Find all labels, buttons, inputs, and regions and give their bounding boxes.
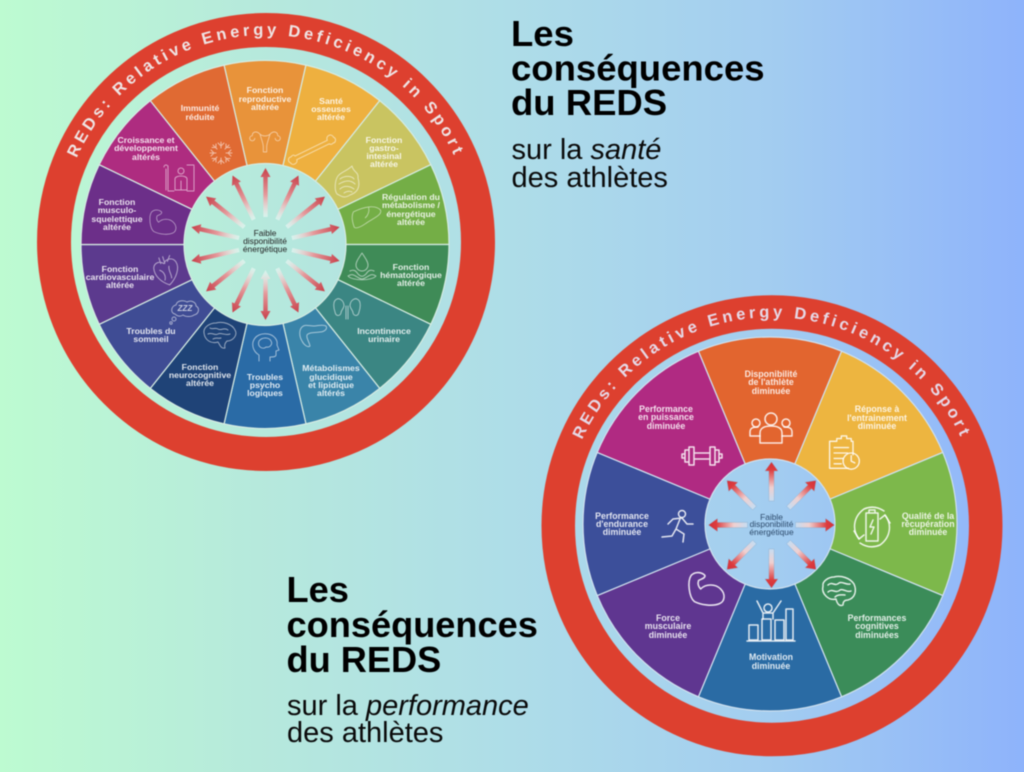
label: régulation du métabolisme: énergétique <box>386 209 436 219</box>
subtitle: des athlètes <box>287 717 443 749</box>
ring title: REDs: Relative Energy Deficiency in Sport <box>66 24 464 158</box>
icon: growth frame <box>164 165 194 191</box>
label: cardiovasculaire: cardiovasculaire <box>86 272 154 282</box>
title: conséquences <box>511 48 765 88</box>
hub text: énergétique <box>243 244 287 254</box>
label: croissance: développement <box>114 143 178 153</box>
icon: chart and person <box>747 601 795 641</box>
panel: wheel of health consequences <box>36 12 496 472</box>
icon: sleep cloud: ZZZ <box>177 304 193 313</box>
icon: sleep cloud <box>170 301 198 324</box>
label: hématologique: Fonction <box>393 262 429 272</box>
label: métabolismes: et lipidique <box>308 380 354 390</box>
hub arrows <box>190 168 341 320</box>
icon: drop and lotus <box>348 253 376 280</box>
sector: troubles psychologiques <box>224 323 306 428</box>
label: neurocognitive: Fonction <box>182 362 218 372</box>
hub text: énergétique <box>749 527 794 537</box>
label: croissance: altérés <box>132 152 160 162</box>
label: hématologique: hématologique <box>380 270 442 280</box>
icon: runner <box>662 510 693 542</box>
label: performances cognitives: diminuées <box>855 630 899 640</box>
heading: performance consequences <box>286 569 538 749</box>
label: gastro-intesinal: Fonction <box>366 135 402 145</box>
label: musculo-squelettique: musculo- <box>98 205 136 215</box>
label: santé osseuses: Santé <box>319 96 343 106</box>
icon: pancreas <box>300 325 327 347</box>
label: réponse: l'entrainement <box>847 413 907 423</box>
label: qualité de la récupération: récupération <box>901 519 955 529</box>
label: force musculaire: diminuée <box>649 630 687 640</box>
label: musculo-squelettique: altérée <box>103 222 131 232</box>
sector: sommeil <box>96 262 229 391</box>
hub text: Faible <box>760 512 783 522</box>
icon: immunity <box>210 142 232 164</box>
label: cardiovasculaire: altérée <box>106 280 134 290</box>
label: troubles psychologiques: Troubles <box>247 372 283 382</box>
icon: dumbbell <box>682 447 722 465</box>
label: neurocognitive: altérée <box>186 378 214 388</box>
icon: brain <box>823 576 855 606</box>
label: immunité: Immunité <box>181 103 219 113</box>
sector: gastro-intestinal <box>301 98 434 227</box>
label: troubles psychologiques: psycho <box>250 380 280 390</box>
label: santé osseuses: osseuses <box>311 104 351 114</box>
label: cardiovasculaire: Fonction <box>102 264 138 274</box>
sector: croissance <box>96 98 229 227</box>
sector: santé osseuse <box>262 61 382 191</box>
label: force musculaire: musculaire <box>645 621 691 631</box>
hub text: disponibilité <box>750 519 794 529</box>
label: métabolismes: altérés <box>317 388 345 398</box>
label: endurance: d'endurance <box>596 519 648 529</box>
label: gastro-intesinal: altérée <box>370 159 398 169</box>
title: Les <box>511 13 574 54</box>
label: sommeil: Troubles du <box>126 326 176 336</box>
label: musculo-squelettique: Fonction <box>99 197 135 207</box>
sector: métabolisme énergétique <box>333 164 453 267</box>
label: puissance: Performance <box>639 404 693 414</box>
subtitle: sur la santé <box>512 134 661 166</box>
label: réponse: Réponse à <box>855 404 899 414</box>
subtitle: des athlètes <box>512 162 668 194</box>
label: fonction reproductive: Fonction <box>247 85 283 95</box>
label: qualité de la récupération: Qualité de la <box>902 511 954 521</box>
heading: health consequences <box>511 13 765 194</box>
title: du REDS <box>286 639 441 680</box>
sector: endurance <box>583 452 710 596</box>
label: endurance: diminuée <box>603 527 641 537</box>
label: musculo-squelettique: squelettique <box>91 214 143 224</box>
sector: fonction reproductive <box>224 61 306 166</box>
label: puissance: en puissance <box>638 412 694 422</box>
hub text: disponibilité <box>243 236 287 246</box>
title: du REDS <box>511 82 667 123</box>
label: croissance: Croissance et <box>118 135 175 145</box>
icon: head with brain <box>253 334 279 361</box>
sector: métabolismes glucidique et lipidique <box>262 298 382 428</box>
label: gastro-intesinal: intesinal <box>366 151 402 161</box>
sector: hématologique <box>333 222 453 325</box>
label: performances cognitives: cognitives <box>855 621 899 631</box>
sector: récupération <box>830 452 957 596</box>
sector: musculo-squelettique <box>77 164 197 267</box>
sector: disponibilité <box>698 337 842 464</box>
label: régulation du métabolisme: métabolisme / <box>382 200 441 210</box>
label: fonction reproductive: reproductive <box>239 94 291 104</box>
label: immunité: réduite <box>186 112 215 122</box>
label: endurance: Performance <box>595 511 649 521</box>
hub text: Faible <box>254 228 277 238</box>
label: incontinence: Incontinence <box>357 326 411 336</box>
icon: uterus <box>250 132 280 152</box>
red outer ring <box>558 312 986 740</box>
panel: wheel of performance consequences <box>540 294 1004 758</box>
label: qualité de la récupération: diminuée <box>909 527 947 537</box>
label: puissance: diminuée <box>647 421 685 431</box>
label: fonction reproductive: altérée <box>251 102 279 112</box>
icon: flexed arm <box>150 210 176 234</box>
label: gastro-intesinal: gastro- <box>369 143 399 153</box>
title: conséquences <box>286 604 538 645</box>
label: disponibilité: diminuée <box>752 386 790 396</box>
sector: réponse à l'entrainement <box>762 341 953 532</box>
label: sommeil: sommeil <box>133 334 169 344</box>
icon: bone <box>286 134 337 166</box>
sector: puissance <box>587 341 778 532</box>
label: performances cognitives: Performances <box>848 613 906 623</box>
hub arrows <box>708 462 834 588</box>
icon: brain <box>204 322 236 348</box>
label: hématologique: altérée <box>397 278 425 288</box>
sector: incontinence <box>301 262 434 391</box>
subtitle: sur la performance <box>287 690 529 722</box>
sector: neurocognitive <box>148 298 268 428</box>
label: santé osseuses: altérée <box>317 112 345 122</box>
sector: force musculaire <box>587 516 778 707</box>
label: motivation: diminuée <box>752 661 790 671</box>
icon: battery recovery <box>854 507 890 547</box>
ring title: REDs: Relative Energy Deficiency in Sport <box>572 306 970 440</box>
sector: cardiovasculaire <box>77 222 197 325</box>
label: troubles psychologiques: logiques <box>247 388 283 398</box>
label: incontinence: urinaire <box>368 334 400 344</box>
label: motivation: Motivation <box>749 652 793 662</box>
label: régulation du métabolisme: altérée <box>397 217 425 227</box>
label: force musculaire: Force <box>656 613 680 623</box>
label: neurocognitive: neurocognitive <box>169 370 231 380</box>
icon: heart <box>151 253 182 288</box>
label: métabolismes: glucidique <box>309 372 353 382</box>
icon: flexed arm <box>689 573 724 605</box>
sector: motivation <box>698 584 842 711</box>
label: métabolismes: Métabolismes <box>302 363 360 373</box>
sector: performances cognitives <box>762 516 953 707</box>
label: réponse: diminuée <box>858 421 896 431</box>
label: disponibilité: Disponibilité <box>745 369 797 379</box>
icon: liver <box>352 207 381 228</box>
label: disponibilité: de l'athlète <box>748 377 794 387</box>
icon: kidneys <box>334 299 360 319</box>
icon: people <box>750 413 792 443</box>
sector: immunité <box>148 61 268 191</box>
icon: intestine <box>335 166 359 197</box>
icon: clipboard and clock <box>830 436 859 469</box>
label: régulation du métabolisme: Régulation du <box>382 192 440 202</box>
title: Les <box>286 569 349 610</box>
red outer ring <box>54 30 478 454</box>
